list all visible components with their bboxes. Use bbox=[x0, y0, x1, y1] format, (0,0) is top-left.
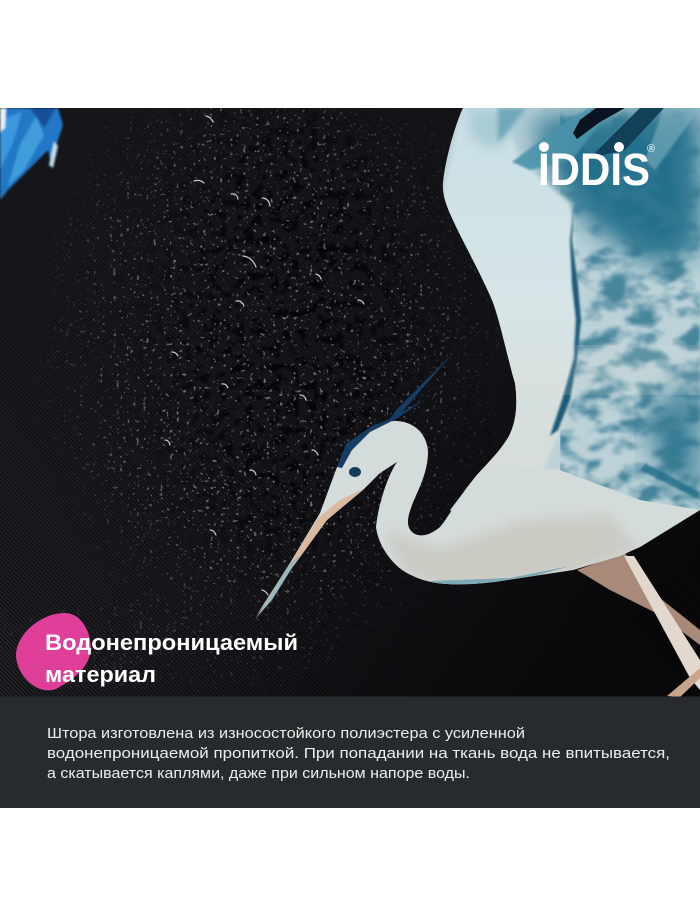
heading bbox=[45, 630, 298, 687]
fabric background bbox=[0, 108, 700, 697]
wing mottling bbox=[560, 108, 700, 528]
photo: dark wet fabric with heron bbox=[0, 108, 700, 697]
water droplets: crescent highlights bbox=[165, 116, 364, 595]
pink accent blob bbox=[16, 613, 91, 690]
description panel bbox=[0, 696, 700, 808]
fabric weave bbox=[0, 197, 492, 696]
head crest bbox=[337, 352, 454, 468]
logo: IDDIS: ® bbox=[647, 143, 655, 155]
heading: материал bbox=[45, 662, 156, 687]
blue body streaks bbox=[640, 463, 700, 500]
water droplets: large shaded drops bbox=[157, 118, 405, 552]
blue feather top left bbox=[0, 108, 63, 200]
heron wing bbox=[440, 108, 700, 558]
warm belly tone bbox=[385, 515, 640, 590]
water droplets: fine highlights bbox=[0, 108, 506, 694]
infographic canvas bbox=[0, 108, 700, 808]
heron body, neck and head bbox=[255, 352, 700, 697]
description text bbox=[47, 725, 670, 782]
heading: Водонепроницаемый bbox=[45, 630, 298, 655]
description text: а скатывается каплями, даже при сильном напоре воды. bbox=[47, 765, 470, 782]
description text: Штора изготовлена из износостойкого полиэстера с усиленной bbox=[47, 725, 525, 742]
logo: IDDIS: IDDIS bbox=[538, 144, 650, 195]
legs bbox=[577, 553, 700, 697]
description text: водонепроницаемой пропиткой. При попадании на ткань вода не впитывается, bbox=[47, 745, 670, 762]
feather streaks at wing top bbox=[468, 108, 700, 170]
wing dark-teal upper shading bbox=[530, 108, 700, 265]
beak bbox=[256, 488, 365, 616]
pale grey band across wing bbox=[562, 345, 700, 395]
pale wing shoulder bbox=[440, 108, 578, 500]
body and neck bbox=[255, 421, 700, 620]
eye bbox=[349, 467, 361, 477]
dark feather dividing line bbox=[550, 205, 581, 436]
